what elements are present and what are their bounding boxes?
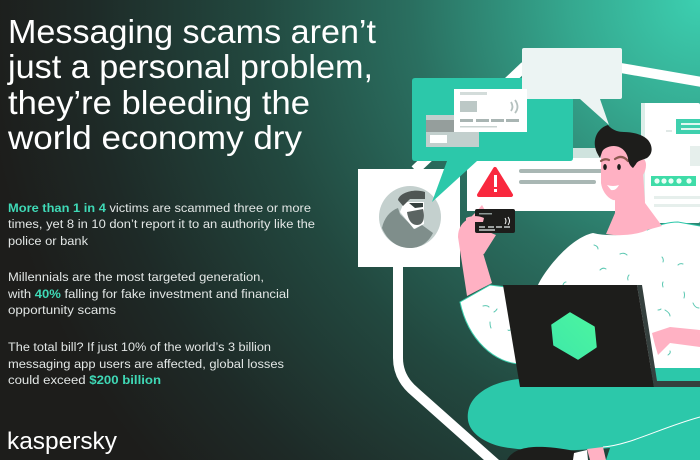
- laptop: [503, 285, 700, 387]
- text block: total bill: could exceed $200 billion: [8, 373, 161, 387]
- neck: [606, 172, 662, 235]
- brows: [601, 157, 628, 161]
- mouth: [607, 185, 619, 190]
- hair: [595, 125, 652, 168]
- panel: alert: [467, 148, 617, 211]
- legs: [468, 379, 700, 460]
- text block: millennials: [7, 270, 289, 317]
- title: they’re bleeding the: [8, 85, 310, 122]
- text block: total bill: [8, 340, 284, 387]
- panel: avatar card: [358, 169, 460, 267]
- title: Messaging scams aren’t: [8, 14, 377, 51]
- text block: total bill: messaging app users are affected, global losses: [8, 357, 284, 371]
- sleeve: [460, 285, 522, 364]
- text block: total bill: The total bill? If just 10% of the world’s 3 billion: [8, 340, 271, 354]
- eyes: [603, 164, 607, 170]
- icon: front card: [454, 89, 527, 132]
- title: just a personal problem,: [7, 49, 373, 86]
- icon: scammer avatar: [379, 186, 441, 248]
- speech bubble: gray: [522, 48, 622, 125]
- face: [601, 140, 645, 200]
- text block: repeat victims: police or bank: [8, 234, 89, 248]
- arm: [458, 232, 492, 296]
- logo: kaspersky: kaspersky: [7, 428, 117, 455]
- shoe: [507, 447, 578, 460]
- text block: repeat victims: times, yet 8 in 10 don’t report it to an authority like the: [8, 217, 315, 231]
- text block: millennials: with 40% falling for fake investment and financial: [7, 287, 289, 301]
- text block: millennials: opportunity scams: [8, 303, 116, 317]
- shirt: [538, 222, 700, 372]
- text block: repeat victims: [8, 201, 315, 248]
- speech bubble: green with payment cards: [412, 78, 573, 202]
- person: [458, 125, 700, 460]
- title: [7, 14, 377, 157]
- shirt pattern: [483, 245, 699, 355]
- ear: [634, 159, 646, 180]
- panel: right document: [641, 103, 700, 223]
- leg strip: [650, 368, 700, 382]
- hand on laptop: [652, 327, 700, 355]
- text block: millennials: Millennials are the most targeted generation,: [8, 270, 264, 284]
- icon: hexagon logo: [552, 313, 596, 359]
- connector lines: [398, 66, 700, 460]
- title: world economy dry: [7, 120, 302, 157]
- text block: repeat victims: More than 1 in 4 victims are scammed three or more: [8, 201, 311, 215]
- hand with card: [458, 205, 515, 254]
- icon: back card: [426, 115, 479, 147]
